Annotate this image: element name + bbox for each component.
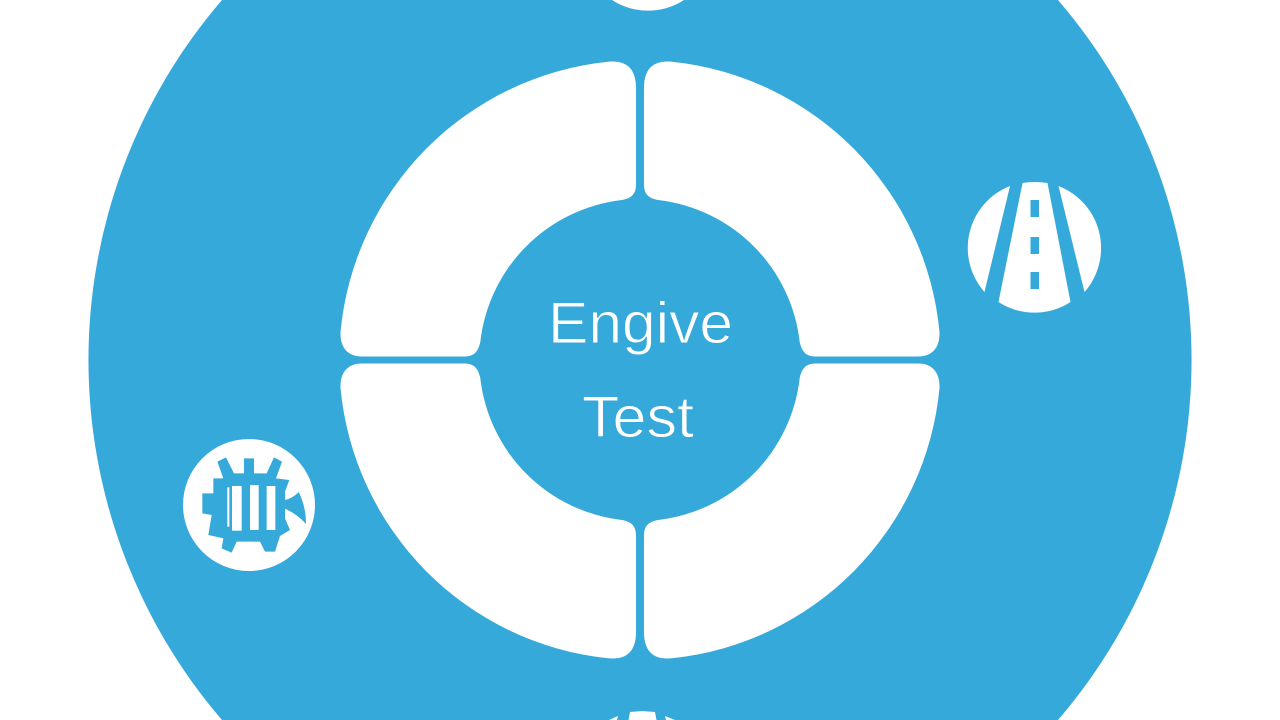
- icon: road: [968, 182, 1101, 313]
- segment: bottom left: [340, 364, 636, 659]
- segment: top left: [340, 61, 636, 357]
- centre title: [548, 291, 733, 450]
- centre title: Test: [582, 385, 694, 450]
- segment: bottom right: [644, 364, 940, 659]
- icon: road cropped at bottom: [609, 711, 675, 720]
- icon: engine gear: [183, 439, 315, 571]
- ring of four white segments: [340, 61, 940, 659]
- top icon: partially cropped white circle: [612, 0, 684, 11]
- centre title: Engive: [548, 291, 733, 356]
- segment: top right: [644, 61, 940, 357]
